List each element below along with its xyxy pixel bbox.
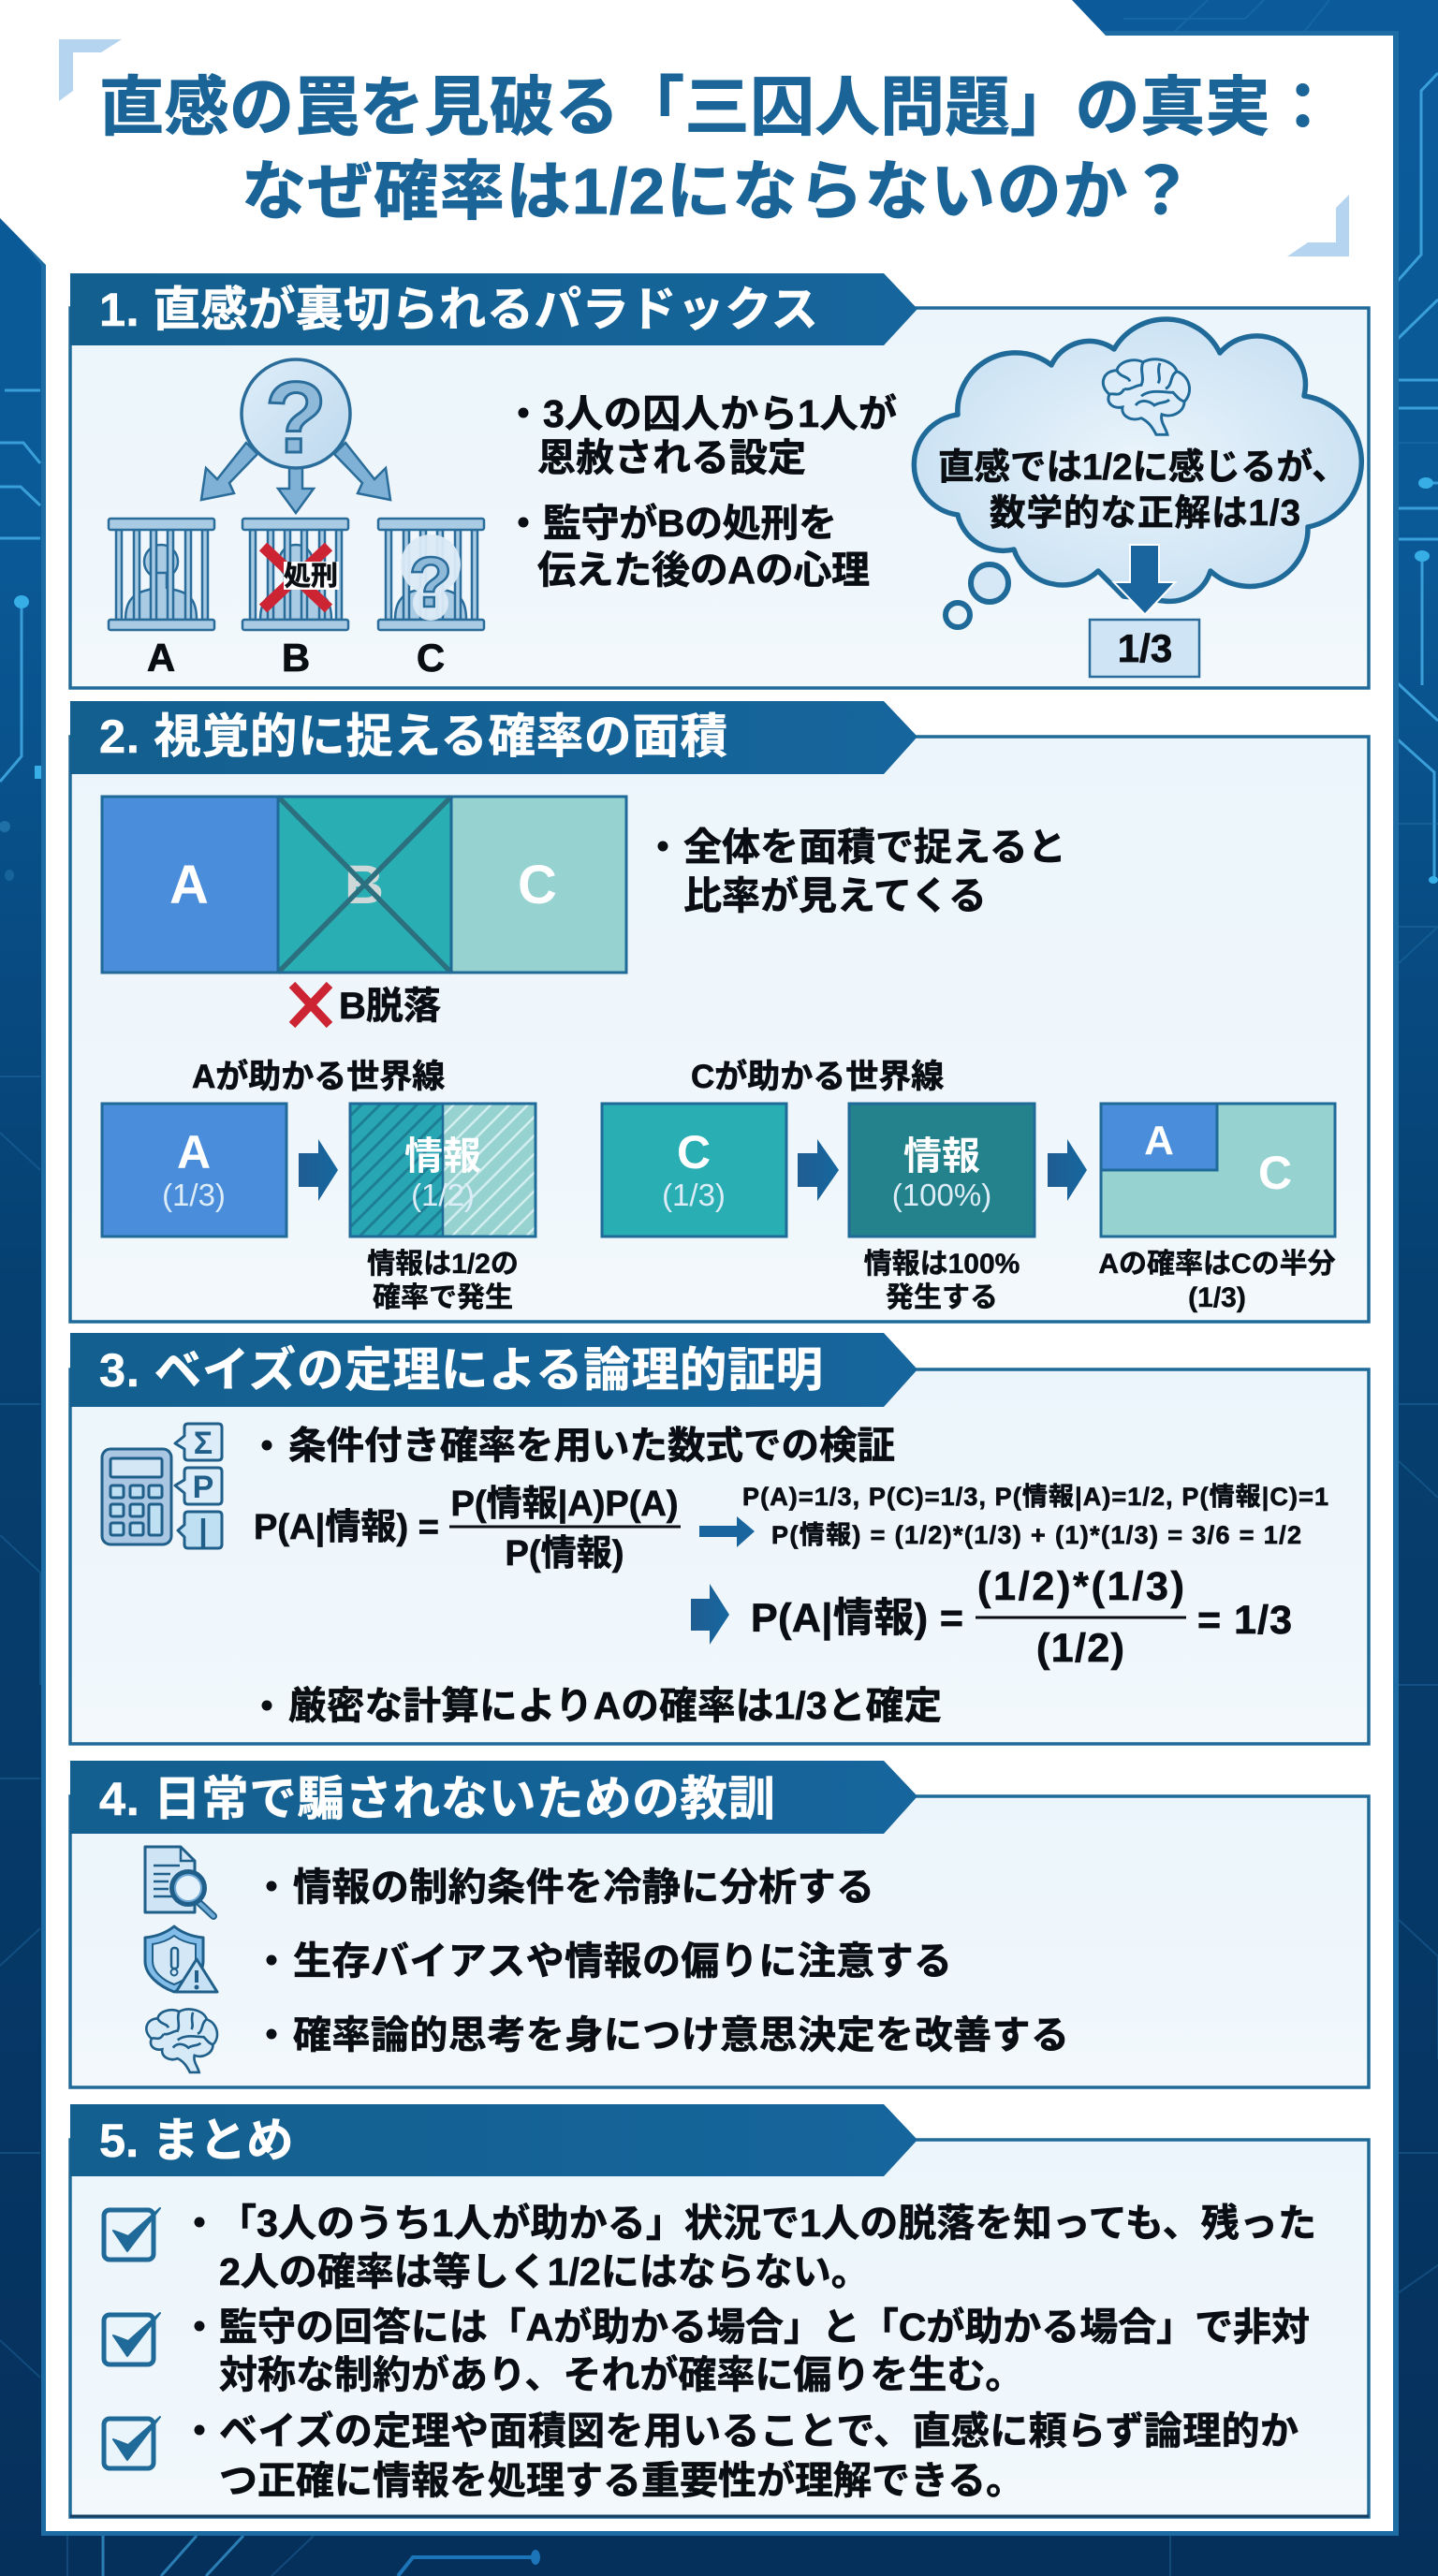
box final ratio: C (1258, 1147, 1292, 1199)
summary item 3 (195, 2409, 1299, 2502)
summary item 2: 対称な制約があり、それが確率に偏りを生む。 (219, 2353, 1023, 2396)
summary item 1 (195, 2202, 1316, 2293)
title bracket top-left (59, 39, 122, 101)
prison C with question: ? (409, 543, 452, 622)
panel: section 1 (70, 273, 1369, 688)
Bayes formula: P(A|情報) = (254, 1508, 439, 1547)
arrow (299, 1139, 338, 1201)
section 1 bullets: 監守がBの処刑を (543, 502, 837, 545)
given values: P(情報) = (1/2)*(1/3) + (1)*(1/3) = 3/6 = 1/2 (771, 1521, 1301, 1549)
section 4 header (70, 1761, 917, 1834)
section 4 header: 4. 日常で騙されないための教訓 (99, 1772, 775, 1825)
given values: P(A)=1/3, P(C)=1/3, P(情報|A)=1/2, P(情報|C)=1 (742, 1483, 1328, 1511)
prison C with question: C (417, 636, 445, 680)
arrow (1048, 1139, 1087, 1201)
thought cloud (914, 319, 1361, 677)
arrow (798, 1139, 839, 1201)
box info 100%: (100%) (892, 1178, 991, 1212)
answer box (1090, 620, 1199, 677)
bullet: conclusion: 厳密な計算によりAの確率は1/3と確定 (288, 1684, 942, 1727)
section 2 bullet: 全体を面積で捉えると (683, 826, 1066, 869)
title line 2: なぜ確率は1/2にならないのか？ (242, 155, 1194, 227)
caption info 100%: 情報は100% (864, 1249, 1020, 1280)
given values (742, 1483, 1328, 1549)
box info 100% (849, 1104, 1034, 1237)
icon: brain (146, 2009, 217, 2072)
result formula (751, 1564, 1292, 1671)
result formula: = 1/3 (1197, 1598, 1292, 1643)
summary item 2 (195, 2305, 1310, 2396)
prison B with execution mark: B (282, 636, 310, 680)
title line 1: 直感の罠を見破る「三囚人問題」の真実： (99, 71, 1335, 143)
section 2 header: 2. 視覚的に捉える確率の面積 (99, 710, 727, 763)
thought bubbles (971, 564, 1008, 602)
prison A: A (147, 636, 175, 680)
icon: shield with warning (145, 1926, 217, 1992)
caption final ratio (1098, 1249, 1336, 1313)
box C 1/3: (1/3) (662, 1178, 726, 1212)
prison A (109, 519, 214, 680)
thought cloud: 1/3 (1118, 626, 1172, 670)
icon: question with three arrows (201, 359, 390, 513)
caption final ratio: (1/3) (1188, 1282, 1246, 1313)
Bayes formula (254, 1485, 681, 1573)
arrow to answer (1116, 546, 1173, 613)
B dropped label: B脱落 (339, 986, 441, 1027)
icon: document with magnifier (145, 1847, 213, 1916)
section 2 header (70, 701, 917, 774)
summary item 1: 2人の確率は等しく1/2にはならない。 (219, 2250, 870, 2293)
section 2 bullet (657, 826, 1066, 917)
prison C with question (378, 519, 484, 680)
icon: calculator with symbols (102, 1424, 222, 1549)
section 1 header: 1. 直感が裏切られるパラドックス (99, 283, 818, 336)
section 1 bullets: 恩赦される設定 (537, 436, 806, 479)
box C 1/3 (602, 1104, 786, 1237)
icon: calculator with symbols: | (198, 1514, 208, 1549)
Bayes formula: P(情報|A)P(A) (451, 1485, 678, 1524)
summary item 2: 監守の回答には「Aが助かる場合」と「Cが助かる場合」で非対 (219, 2305, 1310, 2349)
icon: checkbox 3 (104, 2417, 160, 2468)
prison B with execution mark: 処刑 (284, 561, 338, 592)
box info 1/2: 情報 (404, 1134, 481, 1178)
lesson bullets: 確率論的思考を身につけ意思決定を改善する (293, 2013, 1069, 2056)
prison B with execution mark (242, 519, 348, 680)
arrow (699, 1516, 755, 1547)
result formula: P(A|情報) = (751, 1596, 963, 1641)
cloud text: 直感では1/2に感じるが、 (938, 447, 1348, 488)
caption info 1/2: 情報は1/2の (367, 1249, 519, 1280)
icon: checkbox 1 (104, 2208, 160, 2260)
icon: brain in cloud (1103, 359, 1190, 434)
title bracket bottom-right (1287, 195, 1349, 256)
section 1 bullets: 3人の囚人から1人が (543, 392, 897, 435)
section 3 header: 3. ベイズの定理による論理的証明 (99, 1343, 823, 1397)
result formula: (1/2) (1036, 1626, 1124, 1671)
panel: section 2 (70, 701, 1369, 1322)
box info 1/2: (1/2) (411, 1178, 475, 1212)
box A 1/3: A (177, 1126, 211, 1178)
area diagram: B (345, 855, 384, 915)
bullet: verification: 条件付き確率を用いた数式での検証 (288, 1424, 895, 1467)
box C 1/3: C (677, 1126, 711, 1178)
B dropped label (292, 985, 441, 1027)
title (59, 39, 1349, 256)
box info 100%: 情報 (903, 1134, 980, 1178)
result formula: (1/2)*(1/3) (977, 1564, 1184, 1609)
panel: section 5 (70, 2104, 1369, 2517)
section 1 header (70, 273, 917, 345)
area diagram: C (518, 855, 557, 915)
summary item 3: ベイズの定理や面積図を用いることで、直感に頼らず論理的か (219, 2409, 1299, 2452)
caption info 1/2 (367, 1249, 519, 1313)
icon: calculator with symbols: Σ (194, 1426, 213, 1461)
box info 1/2 (350, 1104, 536, 1237)
box A 1/3: (1/3) (162, 1178, 226, 1212)
caption info 100%: 発生する (886, 1282, 998, 1313)
section 3 header (70, 1333, 917, 1407)
summary item 3: つ正確に情報を処理する重要性が理解できる。 (219, 2459, 1024, 2502)
Bayes formula: P(情報) (506, 1534, 624, 1573)
section 2 bullet: 比率が見えてくる (683, 874, 987, 917)
panel: section 3 (70, 1333, 1369, 1744)
box A 1/3 (102, 1104, 286, 1237)
icon: calculator with symbols: P (193, 1470, 213, 1505)
caption final ratio: Aの確率はCの半分 (1098, 1249, 1336, 1280)
icon: question with three arrows: ? (265, 360, 327, 474)
section 5 header (70, 2104, 917, 2176)
world line A label: Aが助かる世界線 (192, 1059, 445, 1095)
summary item 1: 「3人のうち1人が助かる」状況で1人の脱落を知っても、残った (218, 2202, 1316, 2245)
panel: section 4 (70, 1761, 1369, 2087)
section 5 header: 5. まとめ (99, 2114, 294, 2167)
world line C label: Cが助かる世界線 (691, 1059, 944, 1095)
area diagram: A (169, 855, 209, 915)
caption info 1/2: 確率で発生 (373, 1282, 513, 1313)
box final ratio (1101, 1104, 1335, 1237)
icon: checkbox 2 (104, 2313, 160, 2364)
area diagram (102, 797, 626, 973)
section 1 bullets (519, 392, 897, 592)
section 1 bullets: 伝えた後のAの心理 (537, 549, 870, 592)
lesson bullets (266, 1866, 1069, 2056)
caption info 100% (864, 1249, 1020, 1313)
box final ratio: A (1144, 1118, 1174, 1164)
lesson bullets: 生存バイアスや情報の偏りに注意する (293, 1939, 952, 1983)
lesson bullets: 情報の制約条件を冷静に分析する (293, 1866, 874, 1909)
thought cloud: 数学的な正解は1/3 (990, 493, 1300, 534)
arrow (691, 1584, 729, 1645)
